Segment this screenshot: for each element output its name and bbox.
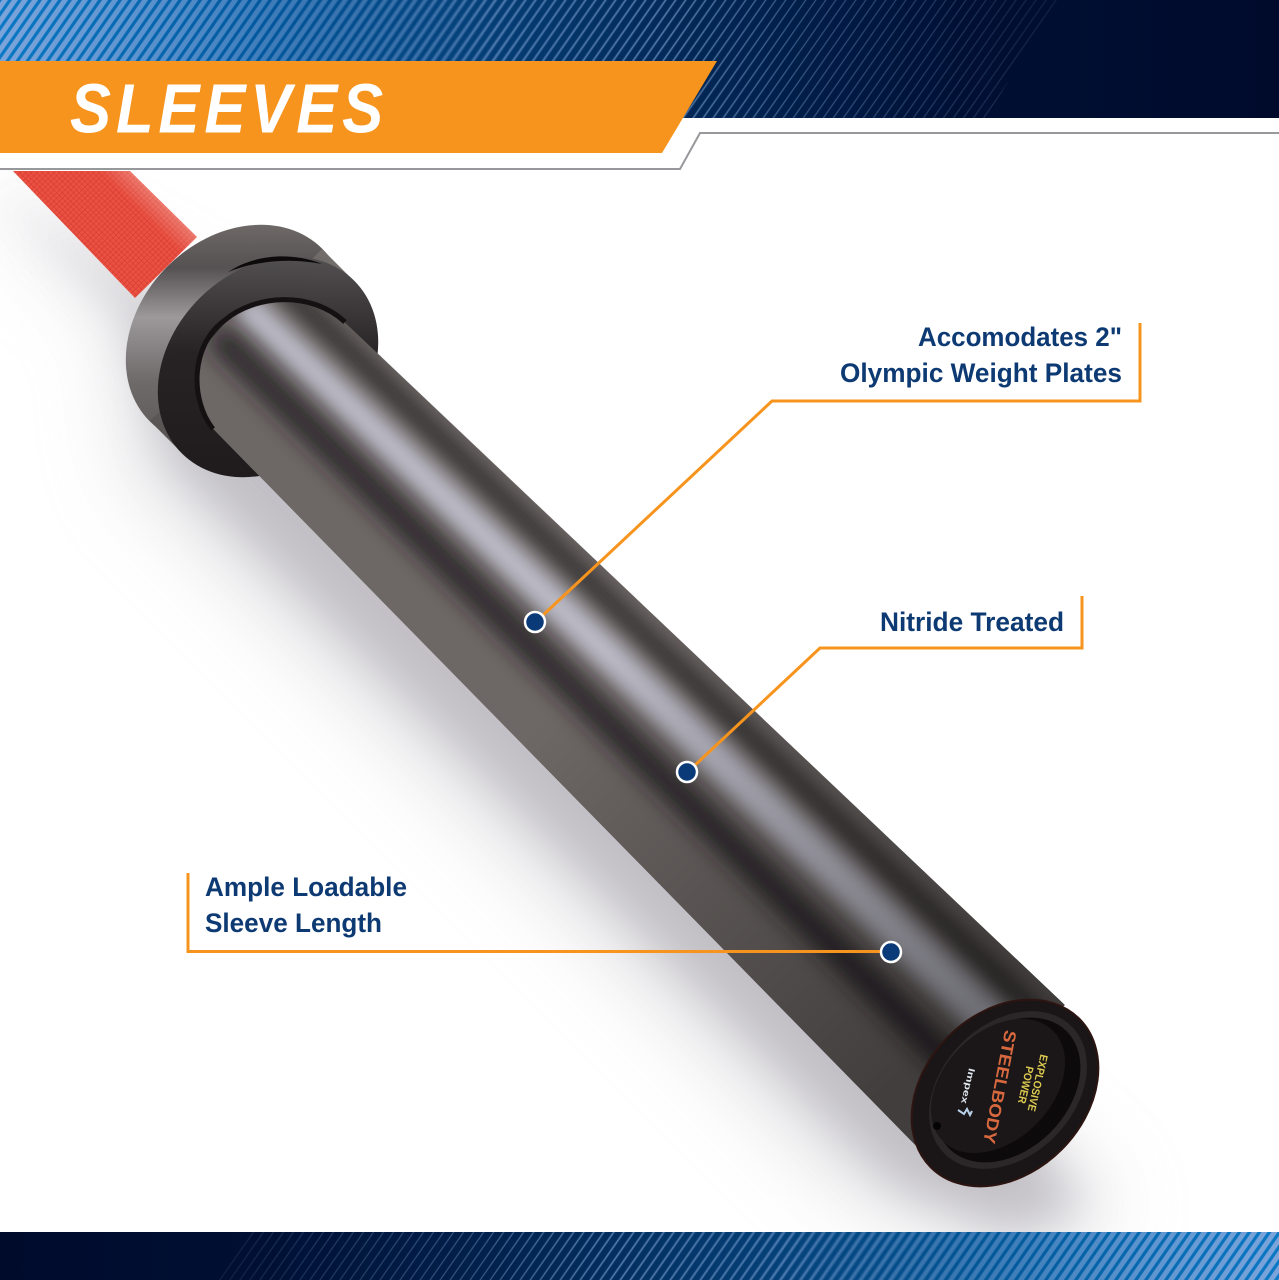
label line two: Sleeve Length [205, 908, 382, 938]
banner diagonal stripes medium [314, 0, 756, 118]
banner base gradient [0, 1232, 1279, 1280]
top banner [0, 0, 1279, 118]
collar body [150, 249, 354, 453]
banner diagonal stripes thick [0, 0, 496, 61]
label: Nitride Treated [880, 607, 1064, 637]
marker dot [525, 612, 545, 632]
label line one: Accomodates 2" [918, 322, 1122, 352]
loadable sleeve [170, 261, 1065, 1150]
white header panel with grey outline [0, 118, 1279, 169]
cap label: brand: Impex [959, 1067, 977, 1105]
sleeve groove arc [197, 300, 345, 429]
red knurled bar shaft [13, 171, 197, 298]
banner diagonal stripes thin [497, 0, 1057, 118]
title: SLEEVES [70, 69, 383, 147]
collar front face [113, 212, 423, 522]
sleeve body [170, 261, 1065, 1150]
banner stripes thin [219, 1232, 784, 1280]
bottom banner [0, 1232, 1279, 1280]
callout: sleeve length [188, 872, 901, 962]
cap disk [905, 993, 1091, 1179]
leader line [693, 596, 1082, 767]
cap inner wall [898, 980, 1118, 1200]
leader line [541, 323, 1140, 617]
banner stripes thick [784, 1232, 1279, 1280]
label line one: Ample Loadable [205, 872, 407, 902]
label line two: Olympic Weight Plates [840, 358, 1122, 388]
banner base gradient [0, 0, 1279, 118]
cap label: Power: POWER [1015, 1065, 1035, 1105]
cap recess [907, 989, 1109, 1191]
cap hole [933, 1122, 941, 1130]
barbell collar [81, 180, 423, 522]
callout: nitride [677, 596, 1082, 782]
marker dot [677, 762, 697, 782]
cast shadow of barbell [0, 185, 1120, 1250]
cap label: Explosive: EXPLOSIVE [1025, 1053, 1049, 1112]
sleeve end cap [874, 962, 1136, 1224]
collar face dark rim highlight [228, 256, 322, 272]
cap outer rim [874, 962, 1136, 1224]
banner stripes medium [526, 1232, 966, 1280]
callout: plates [525, 322, 1140, 632]
title ribbon [0, 61, 717, 153]
cap brand icon [958, 1109, 972, 1115]
leader line [188, 873, 882, 952]
header grey outline [0, 133, 1279, 169]
collar rear ellipse [81, 180, 391, 490]
marker dot [881, 942, 901, 962]
cap label: Steelbody: STEELBODY [979, 1029, 1020, 1146]
